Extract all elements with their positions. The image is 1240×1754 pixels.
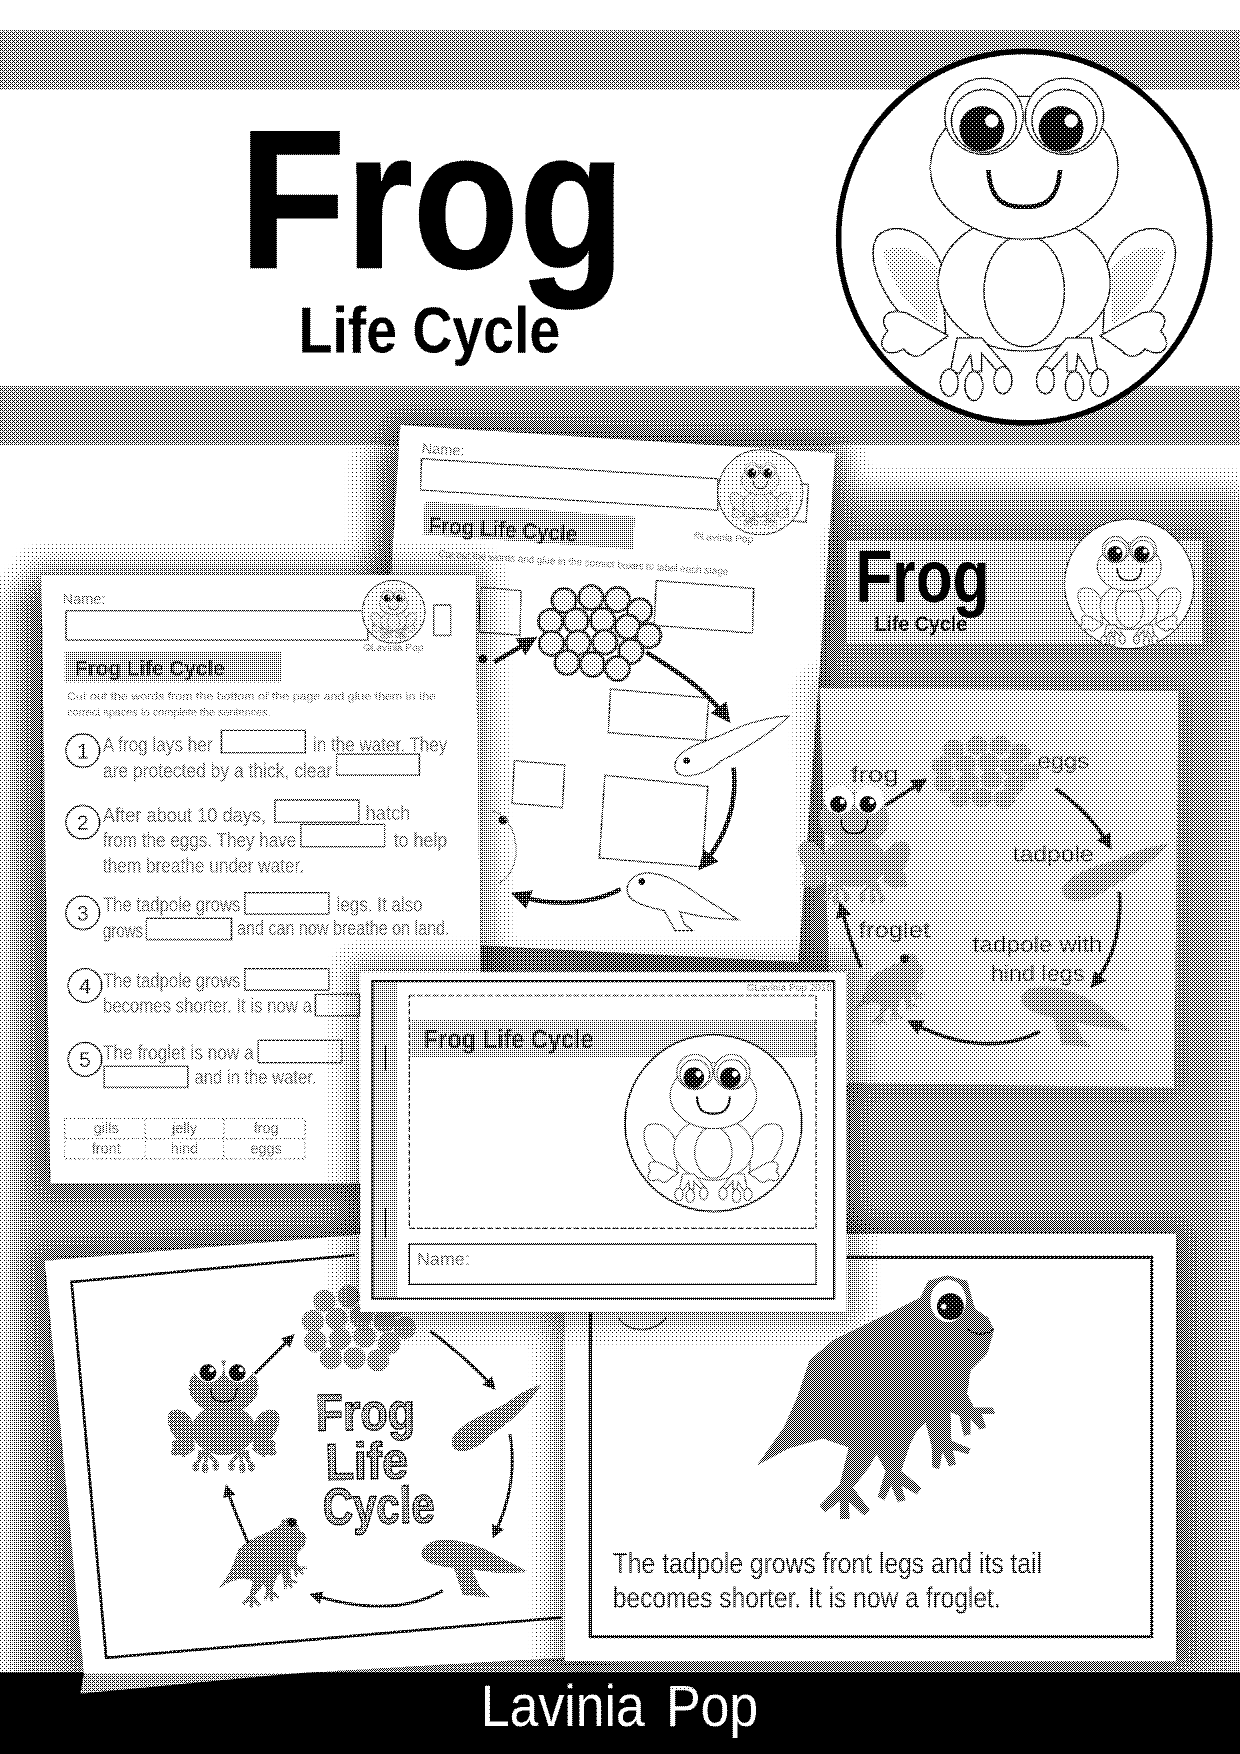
instructions: correct spaces to complete the sentences.: [67, 707, 271, 719]
stage labels: frog: [851, 762, 899, 787]
poster title: Life: [325, 1431, 409, 1491]
sentence 2: After about 10 days,: [103, 805, 266, 827]
sentence 4: [68, 969, 360, 1017]
sentence 1: in the water. They: [313, 735, 448, 757]
icon: frog: [168, 1354, 280, 1473]
name field: ©Lavinia Pop: [363, 643, 424, 654]
heading: Frog: Frog: [239, 89, 625, 309]
panel: fill in the blanks worksheet: [30, 564, 494, 1195]
frog foot arc: [618, 1318, 666, 1329]
footer band: author name: Lavinia Pop: [481, 1673, 758, 1739]
icon: froglet: [219, 1518, 307, 1608]
stage labels: tadpole with: [973, 932, 1102, 957]
sentence 5: [68, 1040, 342, 1089]
name field: Name:: [63, 592, 105, 608]
icon: eggs: [932, 736, 1040, 809]
sentence 1: A frog lays her: [103, 735, 213, 757]
panel: name card: [349, 961, 858, 1323]
sentence 5: The froglet is now a: [103, 1042, 255, 1064]
sentence 1: 1: [77, 739, 89, 763]
froglet partial illustration: [479, 654, 516, 884]
worksheet heading: Frog Life Cycle: [428, 512, 578, 547]
name box: [409, 1244, 816, 1284]
sentence 2: from the eggs. They have: [103, 830, 296, 852]
subheading: Life Cycle: Life Cycle: [299, 293, 560, 366]
sentence 4: 4: [79, 974, 91, 998]
panel: story page with froglet: [553, 1223, 1187, 1670]
cycle arrows: [227, 1331, 512, 1606]
poster header card: Frog: [855, 535, 990, 618]
story text: becomes shorter. It is now a froglet.: [613, 1582, 1001, 1614]
fold strip: [373, 982, 398, 1298]
sentence 3: and can now breathe on land.: [237, 918, 449, 940]
sentence 3: 3: [77, 902, 89, 926]
sentence 4: The tadpole grows: [103, 971, 240, 993]
cut out word table: hind: [171, 1141, 198, 1157]
story text: [613, 1548, 1042, 1614]
worksheet heading: [423, 501, 635, 549]
icon: tadpole: [452, 1385, 541, 1451]
tadpole with legs illustration: [627, 873, 738, 931]
icon: froglet: [853, 953, 925, 1027]
poster title: Cycle: [322, 1476, 435, 1535]
poster header card: [836, 519, 1214, 654]
worksheet instructions: Cut out the words and glue in the correct boxes to label each stage.: [438, 549, 731, 578]
sentence 2: to help: [394, 830, 447, 852]
sentence 1: are protected by a thick, clear: [103, 760, 332, 782]
icon: eggs: [302, 1285, 416, 1371]
icon: tadpole with hind legs: [1021, 986, 1132, 1047]
stage labels: tadpole: [1013, 841, 1094, 866]
cut out word table: front: [92, 1141, 121, 1157]
top decorative band: [0, 30, 1240, 89]
cut out word table: eggs: [250, 1141, 282, 1157]
instructions: [67, 691, 436, 719]
dashed cut area: [409, 996, 816, 1228]
icon: frog: [798, 786, 910, 905]
cut out word table: [65, 1119, 305, 1159]
answer boxes: [479, 581, 754, 867]
heading: Frog Life Cycle: [75, 657, 225, 681]
panel: Frog Life Cycle poster set: [798, 519, 1214, 1105]
cycle arrows: [494, 640, 734, 903]
poster title: Frog: [315, 1382, 416, 1442]
poster cycle diagram: [798, 677, 1190, 1098]
icon: tadpole: [1062, 845, 1168, 901]
lower decorative band: [0, 386, 1240, 445]
poster title: [315, 1382, 435, 1536]
icon: frog badge: [625, 1035, 802, 1211]
footer band: author name: [0, 1672, 1240, 1754]
cut out word table: gills: [94, 1121, 119, 1137]
stage labels: hind legs: [991, 961, 1085, 986]
sentence 2: [66, 800, 447, 878]
worksheet name field: Name:: [421, 441, 465, 460]
sentence 2: hatch: [366, 803, 410, 825]
worksheet name field: [420, 441, 808, 546]
eggs illustration: [535, 582, 664, 683]
cut out word table: frog: [254, 1121, 279, 1137]
poster frame: [72, 1255, 561, 1658]
tadpole illustration: [675, 716, 789, 776]
sentence 5: 5: [79, 1048, 91, 1072]
sentence 3: [66, 893, 449, 942]
panel: classroom life cycle poster (tilted): [34, 1206, 609, 1694]
sentence 3: The tadpole grows: [103, 895, 240, 917]
sentence 3: grows: [103, 920, 143, 942]
sentence 2: them breathe under water.: [103, 856, 304, 878]
instructions: Cut out the words from the bottom of the page and glue them in the: [67, 691, 436, 703]
sentence 1: [66, 730, 448, 782]
icon: big froglet: [757, 1275, 995, 1519]
stage labels: [851, 748, 1102, 986]
heading: [65, 652, 282, 682]
cut out word table: jelly: [171, 1121, 198, 1137]
poster header card: Life Cycle: [874, 612, 967, 636]
icon: frog in circle badge: [839, 51, 1210, 423]
poster credit: ©Lavinia Pop: [1107, 1094, 1167, 1105]
card heading: [410, 1020, 815, 1057]
sentence 5: and in the water.: [195, 1067, 316, 1089]
card heading: Frog Life Cycle: [424, 1026, 594, 1054]
stage labels: froglet: [859, 917, 931, 942]
name field: [63, 581, 451, 654]
card credit: ©Lavinia Pop 2015: [747, 983, 832, 994]
sentence 3: legs. It also: [337, 895, 423, 917]
stage labels: eggs: [1038, 748, 1089, 773]
worksheet name field: ©Lavinia Pop: [693, 531, 754, 546]
icon: tadpole with hind legs: [421, 1540, 528, 1597]
cycle arrows: [841, 781, 1120, 1044]
sentence 4: becomes shorter. It is now a: [103, 995, 313, 1017]
name box: Name:: [417, 1249, 470, 1269]
sentence 2: 2: [77, 811, 89, 835]
panel: cut and paste worksheet (rotated): [358, 414, 846, 973]
story text: The tadpole grows front legs and its tail: [613, 1548, 1042, 1580]
title: Frog Life Cycle: [239, 89, 625, 366]
soft grey background behind the product pages: [9, 447, 1240, 1689]
